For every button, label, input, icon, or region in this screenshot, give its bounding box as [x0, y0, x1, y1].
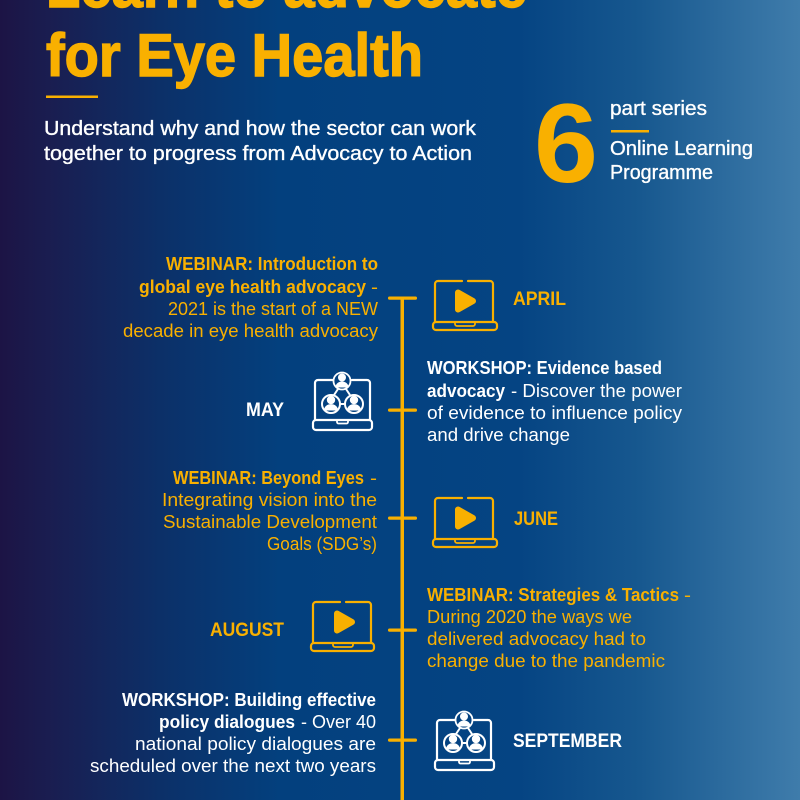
month: June: JUNE [514, 509, 558, 530]
event: April webinar [123, 254, 379, 341]
event: August webinar: - [684, 584, 691, 605]
event: June webinar [162, 467, 377, 554]
event: August webinar: During 2020 the ways we [427, 606, 632, 627]
event: September workshop: policy dialogues [159, 712, 295, 732]
icon: network laptop September [435, 712, 494, 770]
icon: play laptop April [433, 281, 497, 330]
event: September workshop [90, 690, 376, 776]
event: June webinar: Integrating vision into the [162, 489, 377, 510]
event: August webinar: change due to the pandemic [427, 650, 665, 671]
series label: Online Learning [610, 138, 753, 160]
event: May workshop: and drive change [427, 424, 570, 445]
icon: play laptop August [311, 602, 374, 651]
big number 6: 6 [534, 81, 598, 206]
month: September: SEPTEMBER [513, 731, 622, 752]
series label: Programme [610, 162, 713, 184]
event: August webinar: WEBINAR: Strategies & Tactics [427, 585, 679, 605]
icon: network laptop May [313, 372, 372, 430]
event: May workshop: advocacy [427, 381, 505, 401]
event: May workshop: WORKSHOP: Evidence based [427, 358, 662, 378]
series label: part series [610, 98, 707, 120]
event: June webinar: Sustainable Development [163, 511, 377, 532]
event: September workshop: WORKSHOP: Building effective [122, 690, 376, 710]
subtitle: Understand why and how the sector can work [44, 118, 477, 140]
event: April webinar: 2021 is the start of a NEW [168, 298, 379, 319]
event: September workshop: scheduled over the next two years [90, 755, 376, 776]
event: June webinar: Goals (SDG’s) [267, 533, 377, 554]
timeline [388, 296, 417, 800]
subtitle [44, 118, 477, 165]
icon: play laptop June [433, 498, 497, 547]
series label [610, 98, 753, 184]
event: August webinar [427, 584, 691, 671]
event: June webinar: - [370, 467, 377, 488]
month: April: APRIL [513, 289, 566, 310]
event: April webinar: global eye health advocacy [139, 277, 366, 297]
event: September workshop: - Over 40 [301, 711, 376, 732]
event: April webinar: decade in eye health advocacy [123, 320, 379, 341]
event: August webinar: delivered advocacy had to [427, 628, 646, 649]
event: May workshop: of evidence to influence policy [427, 402, 683, 423]
month: May: MAY [246, 400, 284, 421]
event: September workshop: national policy dialogues are [135, 733, 376, 754]
subtitle: together to progress from Advocacy to Action [44, 143, 472, 165]
event: June webinar: WEBINAR: Beyond Eyes [173, 468, 364, 488]
event: April webinar: WEBINAR: Introduction to [166, 254, 378, 274]
event: May workshop: - Discover the power [511, 380, 682, 401]
title: for Eye Health [46, 22, 423, 89]
title [46, 0, 527, 89]
month: August: AUGUST [210, 620, 284, 641]
event: May workshop [427, 358, 683, 445]
event: April webinar: - [371, 276, 378, 297]
